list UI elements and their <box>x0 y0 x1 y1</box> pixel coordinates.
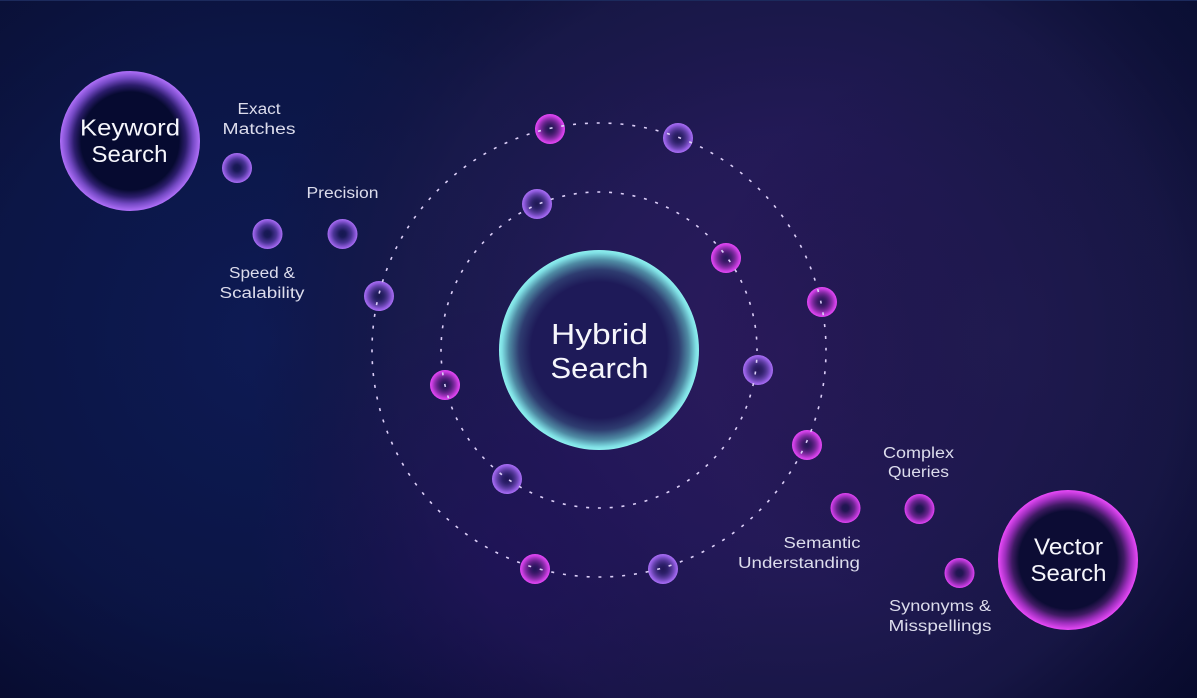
node: outer top magenta <box>535 114 565 144</box>
hub: Hybrid Search <box>499 250 699 450</box>
node: outer bottom violet <box>648 554 678 584</box>
orbit nodes <box>364 114 837 584</box>
node: outer lower-right magenta <box>792 430 822 460</box>
node: outer left violet <box>364 281 394 311</box>
node: outer top violet <box>663 123 693 153</box>
node: inner left magenta <box>430 370 460 400</box>
keyword feature: Exact Matches: Matches <box>222 121 296 138</box>
node: inner top violet <box>522 189 552 219</box>
vector feature: Semantic Understanding: Understanding <box>738 555 860 572</box>
keyword feature: Precision <box>306 185 378 249</box>
node: inner top-right magenta <box>711 243 741 273</box>
vector feature: Complex Queries: Queries <box>888 464 949 481</box>
node: inner right violet <box>743 355 773 385</box>
keyword search circle <box>60 71 200 211</box>
keyword search circle: Search <box>92 141 168 167</box>
vector feature: Complex Queries <box>883 445 954 524</box>
keyword label: Keyword <box>80 114 180 140</box>
vector feature: Semantic Understanding <box>738 493 861 572</box>
vector feature: Complex Queries: Complex <box>883 445 954 462</box>
keyword feature: Exact Matches <box>222 101 296 183</box>
vector feature: Synonyms & Misspellings <box>888 558 992 635</box>
keyword feature: Speed & Scalability: Speed & <box>229 265 296 282</box>
node: outer right magenta <box>807 287 837 317</box>
keyword feature: Speed & Scalability: Scalability <box>220 285 305 302</box>
keyword feature: Exact Matches: Exact <box>238 101 281 118</box>
vector search circle: Search <box>1030 560 1106 586</box>
node: inner bottom violet <box>492 464 522 494</box>
node: outer bottom magenta <box>520 554 550 584</box>
keyword feature: Precision: Precision <box>306 185 378 202</box>
vector feature: Synonyms & Misspellings: Misspellings <box>888 618 992 635</box>
vector label: Vector <box>1034 534 1103 560</box>
keyword feature: Speed & Scalability <box>220 219 305 302</box>
vector search circle <box>998 490 1138 630</box>
inner dotted orbit <box>441 192 757 508</box>
outer dotted orbit <box>372 123 826 577</box>
hub label: Hybrid <box>551 319 648 351</box>
hub: Hybrid Search: Search <box>550 353 648 385</box>
vector feature: Semantic Understanding: Semantic <box>784 535 861 552</box>
vector feature: Synonyms & Misspellings: Synonyms & <box>889 598 992 615</box>
